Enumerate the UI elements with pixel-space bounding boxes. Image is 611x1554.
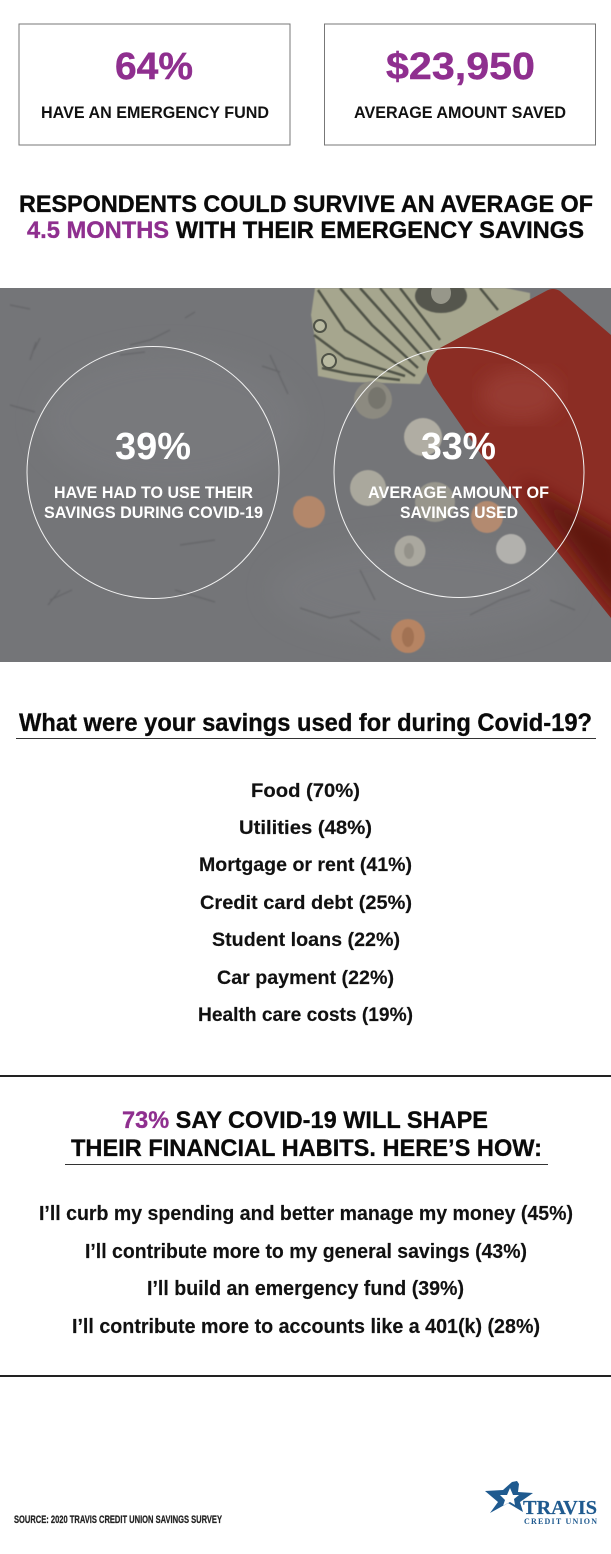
list: savings uses: Food (70%) [251,781,360,802]
red wallet [420,285,611,625]
list: savings uses [198,781,413,1026]
stat card: amount saved: AVERAGE AMOUNT SAVED [354,103,566,122]
stat card: emergency fund: 64% [115,46,193,88]
cash bills [311,279,530,384]
stat card: amount saved [324,24,596,145]
stat circle: used savings: SAVINGS DURING COVID-19 [44,504,263,522]
icon: star [485,1481,533,1513]
heading: survival months: 4.5 MONTHS WITH THEIR EMERGENCY SAVINGS [27,217,584,244]
heading: survival months: RESPONDENTS COULD SURVIVE AN AVERAGE OF [19,191,593,218]
coins [293,381,526,653]
stat card: amount saved: $23,950 [386,46,535,88]
list: savings uses: Utilities (48%) [239,818,372,839]
list: financial habits: I’ll contribute more to my general savings (43%) [85,1241,527,1263]
heading: savings uses: What were your savings used for during Covid-19? [19,709,592,737]
source note: SOURCE: 2020 TRAVIS CREDIT UNION SAVINGS SURVEY [14,1514,222,1526]
list: financial habits: I’ll build an emergency fund (39%) [147,1278,464,1300]
logo: Travis Credit Union: TRAVIS [523,1498,597,1519]
list: savings uses: Mortgage or rent (41%) [199,855,412,876]
list: savings uses: Student loans (22%) [212,930,400,951]
stat circle: average amount used: AVERAGE AMOUNT OF [368,484,549,502]
heading: financial habits: 73% SAY COVID-19 WILL SHAPE [122,1107,488,1134]
heading: financial habits [65,1107,548,1165]
list: savings uses: Credit card debt (25%) [200,893,412,914]
heading: financial habits: THEIR FINANCIAL HABITS. HERE’S HOW: [71,1135,542,1162]
stat circle: average amount used: 33% [421,426,496,468]
list: financial habits [39,1203,573,1338]
stat circle: used savings [27,346,279,598]
stat circle: average amount used [334,348,584,598]
list: savings uses: Health care costs (19%) [198,1005,413,1026]
logo: Travis Credit Union: CREDIT UNION [524,1517,597,1526]
photo background: marble, cash, coins, wallet [0,279,611,662]
list: financial habits: I’ll curb my spending and better manage my money (45%) [39,1203,573,1225]
heading: survival months [19,191,593,244]
stat circle: used savings: HAVE HAD TO USE THEIR [54,484,253,502]
stat card: emergency fund: HAVE AN EMERGENCY FUND [41,103,269,122]
list: savings uses: Car payment (22%) [217,968,394,989]
stat circle: used savings: 39% [115,426,191,468]
stat card: emergency fund [19,24,290,145]
logo: Travis Credit Union [485,1481,597,1526]
stat circle: average amount used: SAVINGS USED [400,504,518,522]
list: financial habits: I’ll contribute more to accounts like a 401(k) (28%) [72,1316,540,1338]
panel: photo with Covid savings stats [0,279,611,662]
